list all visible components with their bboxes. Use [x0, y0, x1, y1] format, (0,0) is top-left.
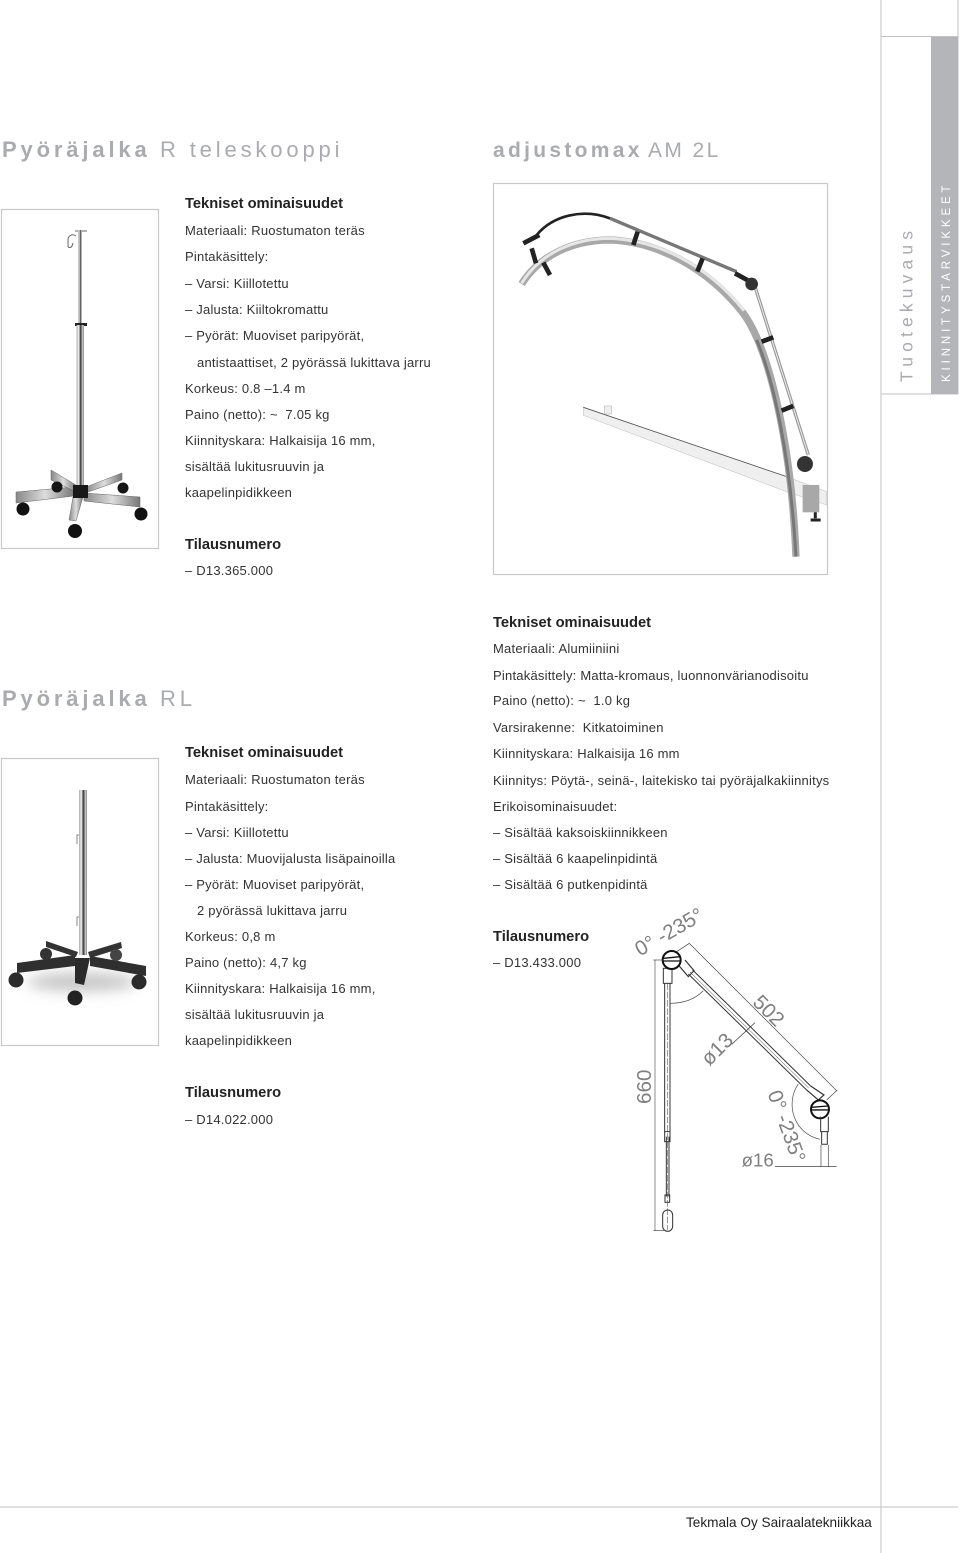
specs: Pyöräjalka R teleskooppi: antistaattiset, 2 pyörässä lukittava jarru — [197, 355, 431, 370]
specs: Pyöräjalka R teleskooppi: – Pyörät: Muoviset paripyörät, — [185, 328, 364, 343]
specs: adjustomax AM 2L: Paino (netto): ~ 1.0 kg — [493, 693, 630, 708]
technical drawing: arm dimensions: ø13 — [697, 1029, 738, 1070]
heading: adjustomax AM 2L: adjustomax — [493, 139, 643, 162]
specs: Pyöräjalka RL: – D14.022.000 — [185, 1112, 273, 1127]
specs: adjustomax AM 2L: Kiinnityskara: Halkaisija 16 mm — [493, 746, 680, 761]
specs: adjustomax AM 2L: – Sisältää kaksoiskiinnikkeen — [493, 825, 668, 840]
specs: Pyöräjalka R teleskooppi: Tekniset ominaisuudet — [185, 196, 343, 212]
specs: Pyöräjalka RL: – Varsi: Kiillotettu — [185, 825, 289, 840]
specs: adjustomax AM 2L — [493, 615, 830, 970]
technical drawing: arm dimensions: 660 — [633, 1070, 656, 1104]
specs: Pyöräjalka RL: – Jalusta: Muovijalusta lisäpainoilla — [185, 851, 396, 866]
specs: Pyöräjalka R teleskooppi: – D13.365.000 — [185, 563, 273, 578]
photo: adjustomax arm — [494, 184, 828, 574]
specs: Pyöräjalka RL: Paino (netto): 4,7 kg — [185, 955, 307, 970]
specs: Pyöräjalka R teleskooppi: – Jalusta: Kiiltokromattu — [185, 302, 329, 317]
heading: Pyöräjalka RL: RL — [160, 686, 196, 711]
specs: Pyöräjalka RL: kaapelinpidikkeen — [185, 1033, 292, 1048]
specs: adjustomax AM 2L: Tekniset ominaisuudet — [493, 615, 651, 631]
heading: Pyöräjalka RL: Pyöräjalka — [2, 686, 151, 711]
heading: adjustomax AM 2L: AM 2L — [648, 139, 721, 162]
specs: Pyöräjalka RL: Kiinnityskara: Halkaisija 16 mm, — [185, 981, 376, 996]
specs: adjustomax AM 2L: Tilausnumero — [493, 929, 589, 945]
technical drawing: arm dimensions: ø16 — [742, 1150, 774, 1171]
side tab: product description: KIINNITYSTARVIKKEET — [941, 182, 953, 382]
technical drawing: arm dimensions: 502 — [748, 991, 789, 1031]
specs: Pyöräjalka RL: Tekniset ominaisuudet — [185, 745, 343, 761]
specs: adjustomax AM 2L: Varsirakenne: Kitkatoiminen — [493, 720, 664, 735]
technical drawing: arm dimensions: 0° -235° — [631, 904, 708, 961]
specs: adjustomax AM 2L: Kiinnitys: Pöytä-, seinä-, laitekisko tai pyöräjalkakiinnitys — [493, 773, 830, 788]
heading: Pyöräjalka R teleskooppi: Pyöräjalka — [2, 137, 151, 162]
specs: Pyöräjalka RL: – Pyörät: Muoviset paripyörät, — [185, 877, 364, 892]
specs: Pyöräjalka RL: sisältää lukitusruuvin ja — [185, 1007, 325, 1022]
specs: Pyöräjalka RL: 2 pyörässä lukittava jarru — [197, 903, 347, 918]
specs: Pyöräjalka RL: Korkeus: 0,8 m — [185, 929, 276, 944]
specs: Pyöräjalka RL: Tilausnumero — [185, 1085, 281, 1101]
specs: adjustomax AM 2L: Materiaali: Alumiiniini — [493, 641, 619, 656]
specs: adjustomax AM 2L: – D13.433.000 — [493, 955, 581, 970]
specs: Pyöräjalka R teleskooppi: Kiinnityskara: Halkaisija 16 mm, — [185, 433, 376, 448]
footer: company name: Tekmala Oy Sairaalatekniikkaa — [686, 1515, 872, 1530]
specs: Pyöräjalka RL: Materiaali: Ruostumaton teräs — [185, 772, 365, 787]
specs: Pyöräjalka R teleskooppi: Materiaali: Ruostumaton teräs — [185, 223, 365, 238]
photo: RL stand — [2, 758, 158, 1046]
technical drawing: arm dimensions — [631, 904, 837, 1231]
specs: Pyöräjalka R teleskooppi: Paino (netto): ~ 7.05 kg — [185, 407, 330, 422]
specs: Pyöräjalka R teleskooppi — [185, 196, 431, 578]
technical drawing: arm dimensions: 0° -235° — [763, 1087, 810, 1166]
heading: Pyöräjalka R teleskooppi: R teleskooppi — [160, 137, 343, 162]
specs: Pyöräjalka RL: Pintakäsittely: — [185, 799, 269, 814]
side tab: product description: Tuotekuvaus — [896, 226, 916, 382]
specs: adjustomax AM 2L: Pintakäsittely: Matta-kromaus, luonnonvärianodisoitu — [493, 668, 809, 683]
specs: adjustomax AM 2L: – Sisältää 6 kaapelinpidintä — [493, 851, 658, 866]
specs: Pyöräjalka R teleskooppi: Korkeus: 0.8 –1.4 m — [185, 381, 306, 396]
specs: Pyöräjalka R teleskooppi: sisältää lukitusruuvin ja — [185, 459, 325, 474]
specs: Pyöräjalka R teleskooppi: Pintakäsittely: — [185, 249, 269, 264]
specs: adjustomax AM 2L: – Sisältää 6 putkenpidintä — [493, 877, 648, 892]
specs: adjustomax AM 2L: Erikoisominaisuudet: — [493, 799, 617, 814]
photo: telescopic stand — [2, 210, 158, 548]
specs: Pyöräjalka R teleskooppi: Tilausnumero — [185, 537, 281, 553]
specs: Pyöräjalka R teleskooppi: kaapelinpidikkeen — [185, 485, 292, 500]
specs: Pyöräjalka RL — [185, 745, 396, 1127]
specs: Pyöräjalka R teleskooppi: – Varsi: Kiillotettu — [185, 276, 289, 291]
